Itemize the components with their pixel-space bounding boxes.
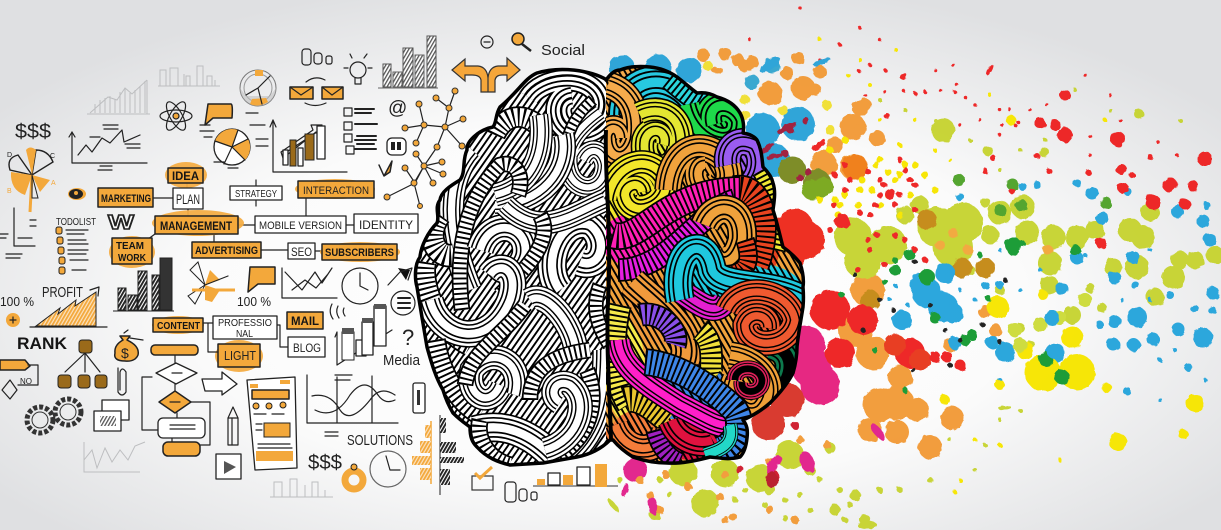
flowchart — [142, 345, 210, 456]
percent labels — [0, 294, 271, 309]
box: marketing: MARKETING — [101, 193, 151, 205]
cups — [302, 49, 332, 65]
box: subscribers: SUBSCRIBERS — [325, 247, 394, 259]
paint splatter — [606, 8, 1215, 529]
orange fan chart — [7, 148, 56, 212]
orange fan chart: C — [50, 153, 55, 160]
clock upper — [342, 268, 378, 304]
splatter: elongated drops — [606, 54, 1012, 529]
brain outline — [415, 66, 803, 465]
w icon: W — [108, 212, 134, 234]
light bulb — [344, 54, 372, 84]
small axis sketch — [0, 208, 36, 258]
cups lower — [505, 482, 537, 502]
wifi signal — [330, 304, 345, 319]
splatter: large blue blobs near brain — [622, 54, 877, 190]
picture frames — [94, 400, 129, 431]
gray bars lower — [270, 479, 333, 497]
splatter: yellow and green lower right — [945, 120, 1195, 442]
gray scribble — [84, 442, 145, 472]
small orange bars — [533, 464, 618, 487]
question mark: ? — [402, 325, 414, 350]
check box — [472, 467, 493, 490]
magnifier — [512, 33, 531, 51]
money bag: $ — [121, 345, 129, 361]
money bag — [115, 330, 143, 361]
box: mobile version — [255, 216, 346, 233]
orange fan chart small — [188, 262, 235, 304]
atom icon — [160, 99, 192, 133]
dark hatched bar chart — [113, 258, 174, 311]
3d bar chart — [335, 304, 392, 365]
box: professional: PROFESSIO — [218, 318, 272, 329]
phone icon — [413, 383, 425, 413]
box: seo: SEO — [291, 245, 312, 259]
line chart sketch — [69, 125, 147, 170]
hatched horizontal bars — [412, 415, 464, 495]
envelopes — [290, 78, 343, 106]
box: advertising: ADVERTISING — [195, 245, 258, 257]
orange fan chart: D — [7, 152, 12, 159]
box: subscribers — [322, 244, 397, 260]
orange fan chart: A — [51, 180, 56, 187]
splatter: blue center and right side — [890, 183, 1213, 400]
outline arrow icon — [388, 268, 412, 285]
box: identity: IDENTITY — [359, 218, 413, 232]
orange ring — [345, 464, 363, 489]
box: interaction — [298, 181, 374, 198]
speech list icon — [391, 291, 415, 315]
box: blog — [288, 337, 325, 357]
mind map boxes — [98, 162, 418, 372]
splatter: red droplets — [750, 8, 1205, 492]
orange double arrow — [452, 58, 520, 92]
box: strategy: STRATEGY — [235, 189, 277, 200]
dollar signs: $$$ — [15, 121, 51, 143]
orange pie chart — [200, 113, 268, 168]
gray hatched bars — [378, 36, 438, 88]
text: profit and rising arrow: PROFIT — [42, 284, 83, 301]
box: team work: WORK — [118, 252, 146, 264]
arrow outline — [202, 372, 237, 395]
box: blog: BLOG — [293, 341, 321, 355]
right hemisphere color underlay — [606, 68, 802, 462]
minus circle — [481, 36, 493, 48]
gray bar sketch — [158, 66, 220, 86]
orange and gray wheel — [240, 70, 276, 106]
right lobes — [607, 78, 803, 462]
box: interaction: INTERACTION — [303, 185, 369, 197]
orange arrow and no box — [0, 360, 38, 399]
text: rank: RANK — [17, 334, 68, 353]
box: management — [155, 216, 238, 234]
box: plan — [173, 188, 203, 209]
pen — [228, 407, 238, 445]
solutions graph — [307, 375, 398, 436]
box: marketing — [98, 188, 153, 207]
splatter: red and pink zone — [620, 228, 930, 520]
checklist — [344, 108, 377, 154]
text: todo list — [56, 217, 96, 274]
left hemisphere sketches — [0, 33, 618, 502]
box: mail: MAIL — [291, 314, 319, 328]
clock lower — [370, 451, 406, 487]
box: professional: NAL — [236, 329, 253, 340]
box: professional — [213, 316, 277, 340]
box: identity — [354, 214, 418, 233]
dollar signs lower: $$$ — [308, 452, 342, 474]
orange speech small — [248, 267, 275, 292]
left lobes — [424, 75, 610, 465]
box: mobile version: MOBILE VERSION — [259, 220, 342, 232]
orange fan chart: B — [7, 188, 12, 195]
text: solutions: SOLUTIONS — [347, 432, 413, 449]
orange arrow and no box: NO — [20, 377, 32, 386]
box: idea: IDEA — [172, 169, 199, 183]
brain: right hemisphere — [606, 68, 802, 462]
box: light — [218, 344, 260, 367]
box: management: MANAGEMENT — [160, 219, 233, 233]
network nodes — [384, 88, 466, 208]
brain center divide — [606, 130, 611, 440]
text: media: Media — [383, 352, 421, 369]
box: content — [153, 318, 288, 352]
brain: left hemisphere — [417, 71, 608, 464]
orange plus icon — [6, 313, 20, 327]
gears — [27, 399, 81, 433]
orange check heart — [379, 161, 392, 176]
box: team work: TEAM — [116, 241, 144, 252]
org chart thumbs — [58, 340, 107, 388]
paper clip — [118, 368, 126, 395]
play button — [216, 454, 241, 479]
bar chart with arrow — [270, 120, 347, 172]
box: strategy — [230, 186, 282, 200]
splatter: orange and lime cloud — [820, 105, 1215, 447]
box: advertising — [192, 242, 261, 258]
percent labels: 100 % — [0, 294, 34, 309]
text: todo list: TODOLIST — [56, 217, 96, 228]
tape icon — [387, 138, 406, 155]
percent labels: 100 % — [237, 294, 271, 309]
line chart small — [282, 268, 337, 298]
at sign: @ — [388, 98, 407, 119]
box: content: CONTENT — [157, 320, 200, 332]
text: profit and rising arrow — [30, 284, 107, 327]
box: team work — [112, 238, 152, 264]
heart icon — [398, 268, 410, 280]
text: social: Social — [541, 42, 585, 59]
box: light: LIGHT — [224, 348, 256, 363]
orange pill icon — [68, 188, 86, 200]
box: mail — [287, 312, 323, 329]
orange speech bubble — [205, 104, 232, 125]
web page sketch — [247, 377, 297, 470]
box: plan: PLAN — [176, 191, 200, 207]
gray area chart — [87, 80, 150, 114]
